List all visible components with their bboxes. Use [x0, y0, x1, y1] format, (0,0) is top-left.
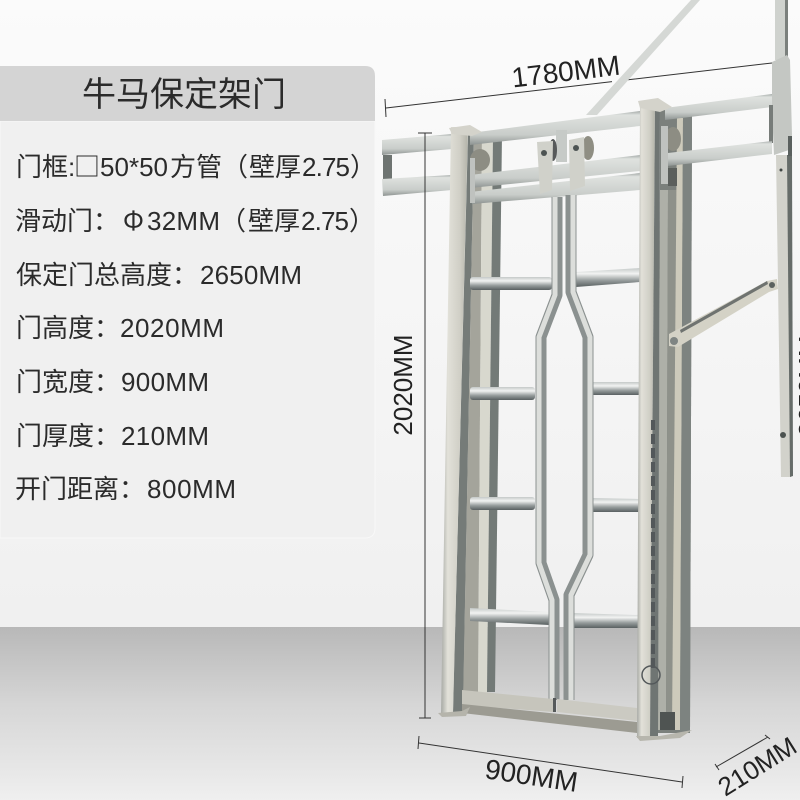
dimension: 1780MM — [385, 50, 772, 117]
left front post — [438, 125, 482, 717]
spec: total height: 保定门总高度： — [16, 260, 198, 290]
spec: opening distance: 800MM — [147, 474, 236, 504]
spec: door frame: （ — [222, 152, 248, 182]
back column left — [453, 134, 502, 712]
right support pole — [772, 0, 793, 477]
background floor — [0, 627, 800, 800]
spec: sliding door: 2.75 — [301, 206, 349, 236]
right door half — [569, 195, 640, 700]
rollers and hangers — [470, 126, 681, 203]
bottom door rails — [462, 690, 637, 733]
dimension: 900MM: 900MM — [483, 753, 580, 798]
dimension: 1780MM: 1780MM — [510, 50, 622, 93]
back column right — [658, 110, 692, 733]
spec: sliding door: 壁厚 — [248, 206, 300, 236]
bent tube — [569, 195, 588, 700]
dimension: 2020MM: 2020MM — [388, 334, 418, 436]
panel body — [0, 121, 375, 538]
spec: door thickness: 210MM — [121, 421, 209, 451]
heading: 牛马保定架门 — [82, 76, 286, 114]
spec: door height: 门高度： — [16, 313, 120, 343]
door track — [470, 173, 640, 204]
panel header — [0, 66, 375, 121]
dimension: 2020MM — [388, 133, 432, 718]
spec: door frame: 门框: — [16, 152, 75, 182]
upper rail — [382, 94, 772, 155]
spec: door width: 门宽度： — [16, 367, 120, 397]
spec: door frame: 2.75 — [302, 152, 350, 182]
rungs — [576, 268, 640, 287]
left door half — [470, 197, 557, 700]
spec: opening distance: 开门距离： — [15, 474, 145, 504]
lower rail — [382, 141, 772, 196]
spec: sliding door: Φ — [123, 201, 144, 238]
spec: sliding door: （ — [220, 206, 246, 236]
background wall — [0, 0, 800, 627]
spec: door frame: 50*50 — [100, 152, 168, 182]
spec: sliding door: 滑动门： — [15, 206, 119, 236]
chain and ring — [642, 420, 660, 684]
bottom square tube end — [660, 712, 675, 730]
spec: door thickness: 门厚度： — [16, 421, 120, 451]
bent tube — [541, 197, 557, 700]
right rail spacer — [769, 105, 773, 143]
centre rail spacer — [556, 130, 567, 162]
stay arm — [669, 279, 778, 347]
diagonal brace — [586, 0, 700, 115]
spec: total height: 2650MM — [200, 260, 302, 290]
left rail end cap — [383, 155, 392, 179]
rungs — [470, 277, 552, 290]
spec: door height: 2020MM — [120, 313, 224, 343]
spec: sliding door: 32MM — [147, 206, 220, 236]
right front post — [636, 98, 692, 741]
dimension: 900MM — [418, 736, 683, 798]
spec: sliding door: ） — [349, 206, 375, 236]
spec: door frame: □ — [74, 147, 100, 184]
spec: door frame: 方管 — [170, 152, 222, 182]
spec: door frame: 壁厚 — [249, 152, 301, 182]
panel: specifications — [0, 66, 376, 538]
spec: door width: 900MM — [121, 367, 209, 397]
spec: door frame: ） — [350, 152, 376, 182]
